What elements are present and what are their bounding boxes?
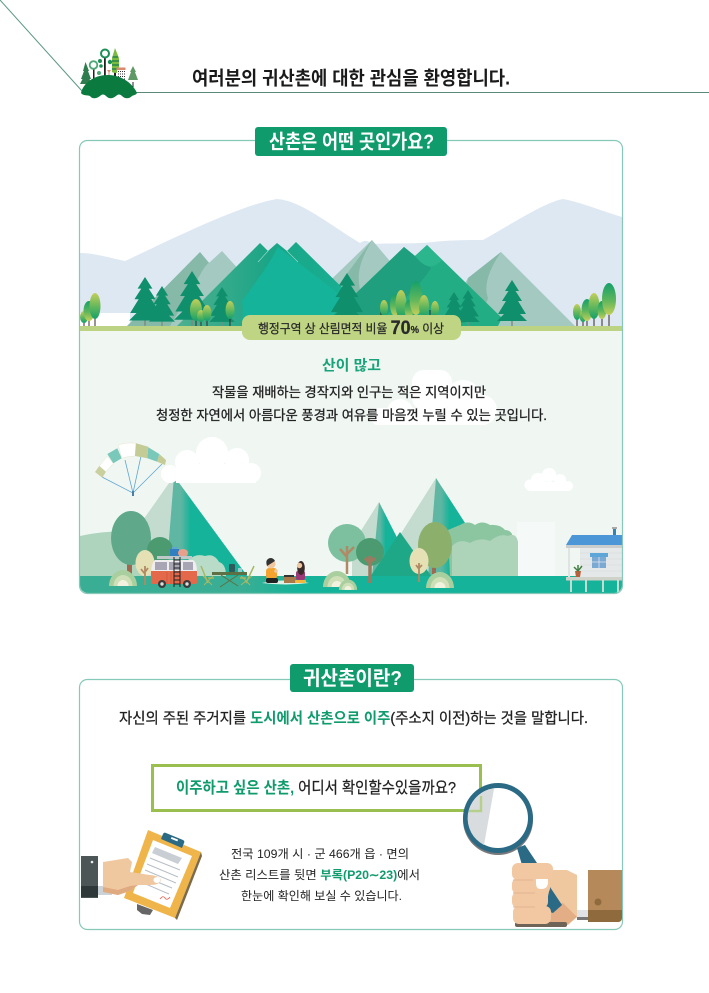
house on stilts	[566, 527, 623, 592]
bottom hills	[80, 532, 143, 576]
second mountains	[352, 478, 465, 576]
definition sentence: 자신의 주된 주거지를 도시에서 산촌으로 이주(주소지 이전)하는 것을 말합니다.	[119, 710, 588, 727]
forest ratio pill: 70	[391, 318, 411, 339]
heading badge: 귀산촌이란?	[303, 667, 402, 690]
camper van	[151, 547, 197, 588]
bushes behind van	[188, 555, 226, 576]
description	[156, 385, 547, 423]
heading badge	[255, 127, 447, 156]
teal mountains	[177, 242, 502, 326]
list note: 한눈에 확인해 보실 수 있습니다.	[241, 889, 402, 903]
middle trees	[323, 522, 454, 590]
picnic table and chairs	[201, 564, 254, 587]
icon: hand holding magnifier	[463, 783, 622, 927]
heading badge: 산촌은 어떤 곳인가요?	[269, 130, 434, 154]
people on picnic mat	[262, 558, 309, 584]
cloud large	[161, 437, 261, 483]
panel outline	[80, 140, 622, 594]
title: 여러분의 귀산촌에 대한 관심을 환영합니다.	[192, 68, 510, 90]
panel: what is return to village	[80, 664, 622, 930]
list note: 산촌 리스트를 뒷면 부록(P20∼23)에서	[219, 868, 420, 882]
distant mountains	[80, 199, 622, 326]
description: 청정한 자연에서 아름다운 풍경과 여유를 마음껏 누릴 수 있는 곳입니다.	[156, 408, 547, 423]
callout box: 이주하고 싶은 산촌, 어디서 확인할수있을까요?	[176, 779, 456, 797]
forest ratio pill: 이상	[422, 322, 445, 336]
forest ratio pill: %	[411, 325, 419, 336]
round trees	[80, 281, 616, 326]
panel: what is a mountain village	[79, 127, 623, 594]
panel illustration content	[79, 199, 623, 594]
bushes	[448, 522, 518, 576]
icon: forest island logo	[80, 48, 138, 98]
fir trees	[129, 271, 527, 326]
left trees	[109, 511, 173, 586]
teal ground	[79, 576, 623, 594]
camping mountain	[143, 476, 248, 577]
grey-green mountains	[127, 240, 575, 326]
panel outline	[80, 680, 622, 930]
header diagonal line	[0, 0, 82, 91]
heading badge	[290, 664, 414, 692]
ground strip	[79, 326, 623, 331]
cloud behind description	[371, 370, 497, 425]
header rule	[136, 92, 709, 94]
subheading: 산이 많고	[322, 358, 381, 374]
callout box	[152, 766, 480, 810]
description: 작물을 재배하는 경작지와 인구는 적은 지역이지만	[212, 385, 486, 400]
icon: hand holding clipboard	[81, 830, 202, 920]
parachute	[95, 443, 166, 496]
list note	[219, 847, 420, 903]
cloud small	[524, 468, 573, 491]
list note: 전국 109개 시 · 군 466개 읍 · 면의	[231, 847, 409, 861]
forest ratio pill	[242, 315, 461, 340]
forest ratio pill: 행정구역 상 산림면적 비율	[258, 322, 395, 336]
